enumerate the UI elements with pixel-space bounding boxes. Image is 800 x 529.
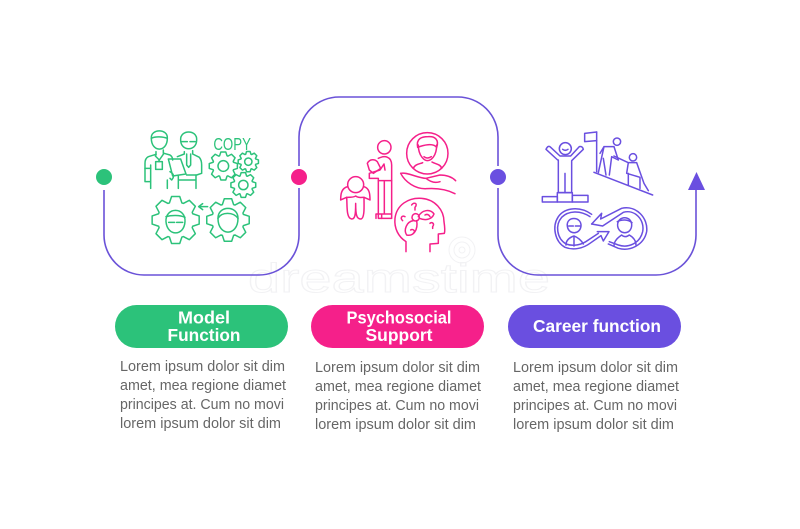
body text: career function: lorem ipsum dolor sit dim [513,417,674,433]
body text: model function: lorem ipsum dolor sit dim [120,416,281,432]
body text: psychosocial support: principes at. Cum no movi [315,398,479,414]
body text: career function: Lorem ipsum dolor sit dim [513,360,678,376]
pill heading: model function [115,305,288,348]
panel: psychosocial support [311,305,484,433]
body text: psychosocial support: amet, mea regione diamet [315,379,481,395]
dot: purple [490,169,506,185]
panel: career function [508,305,681,433]
body text: model function: amet, mea regione diamet [120,378,286,394]
body text: psychosocial support [315,360,481,433]
icon: psychosocial support [341,133,456,252]
dot: pink [291,169,307,185]
icon: model function: COPY [213,134,251,154]
pill heading: model function: Model [178,308,230,328]
body text: psychosocial support: Lorem ipsum dolor sit dim [315,360,480,376]
dot: green [96,169,112,185]
watermark [248,237,550,301]
pill heading: psychosocial support: Support [366,325,433,345]
icon: career function [542,132,653,249]
panel: model function [115,305,288,432]
body text: model function: Lorem ipsum dolor sit dim [120,359,285,375]
body text: model function: principes at. Cum no movi [120,397,284,413]
body text: model function [120,359,286,432]
connector line [104,97,696,275]
pill heading: career function [508,305,681,348]
body text: career function [513,360,679,433]
body text: career function: amet, mea regione diamet [513,379,679,395]
body text: psychosocial support: lorem ipsum dolor sit dim [315,417,476,433]
arrow head [688,172,705,190]
watermark: dreamstime [248,255,550,301]
icon: model function [145,131,258,244]
body text: career function: principes at. Cum no movi [513,398,677,414]
pill heading: model function: Function [168,325,240,345]
pill heading: career function: Career function [533,316,661,336]
pill heading: psychosocial support: Psychosocial [346,308,452,328]
pill heading: psychosocial support [311,305,484,348]
